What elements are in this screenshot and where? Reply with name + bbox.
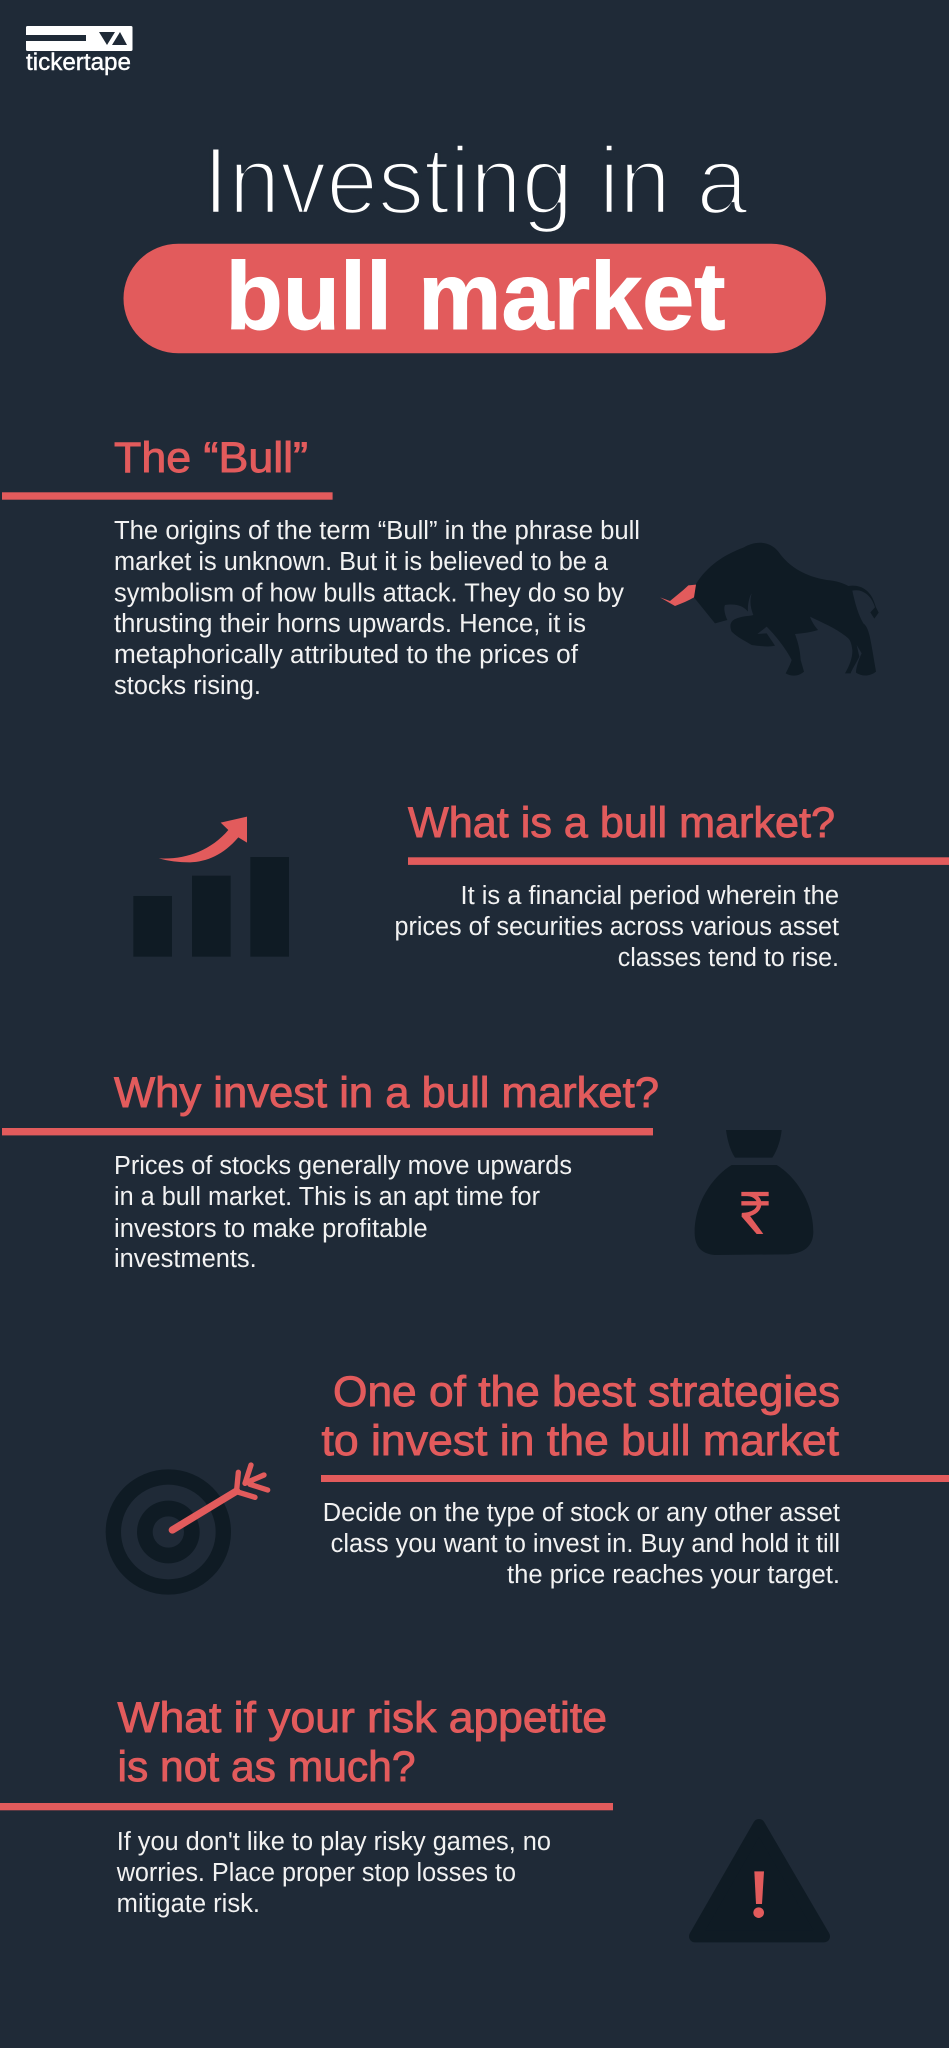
body text — [394, 882, 839, 972]
rule — [2, 492, 333, 500]
heading: best strategies: to invest in the bull market — [322, 1418, 839, 1465]
body text: metaphorically attributed to the prices of — [114, 641, 579, 669]
body text: mitigate risk. — [117, 1890, 260, 1918]
icon: rupee money bag — [695, 1130, 813, 1255]
body text: investments. — [114, 1245, 257, 1273]
body text: If you don't like to play risky games, no — [117, 1828, 551, 1856]
panel: the bull — [2, 435, 879, 700]
heading: risk appetite: What if your risk appetite — [118, 1695, 607, 1742]
rule — [321, 1475, 949, 1482]
heading: The Bull: The “Bull” — [114, 435, 308, 482]
body text: It is a financial period wherein the — [460, 882, 839, 910]
title pill: bull market: bull market — [226, 243, 726, 350]
body text: market is unknown. But it is believed to be a — [114, 548, 609, 576]
body text: The origins of the term “Bull” in the phrase bull — [114, 517, 640, 545]
body text: Decide on the type of stock or any other asset — [323, 1499, 840, 1527]
panel: risk appetite — [0, 1695, 824, 1936]
body text: class you want to invest in. Buy and hold it till — [331, 1530, 840, 1558]
title — [124, 128, 826, 353]
heading: risk appetite — [118, 1695, 607, 1791]
icon: rising bar chart with arrow — [133, 817, 289, 957]
rule — [0, 1803, 613, 1810]
heading: best strategies — [322, 1369, 840, 1465]
heading: best strategies: One of the best strategies — [333, 1369, 840, 1416]
panel: best strategies — [106, 1369, 949, 1595]
body text — [114, 1152, 572, 1273]
logo: tickertape — [26, 26, 132, 76]
body text: Prices of stocks generally move upwards — [114, 1152, 572, 1180]
heading: what is a bull market: What is a bull market? — [408, 800, 835, 847]
icon: target with arrow — [106, 1465, 268, 1595]
body text: worries. Place proper stop losses to — [116, 1859, 516, 1887]
body text: symbolism of how bulls attack. They do so by — [114, 580, 624, 608]
body text: prices of securities across various asset — [394, 913, 839, 941]
body text: stocks rising. — [114, 672, 261, 700]
icon: warning triangle — [695, 1825, 824, 1936]
body text — [323, 1499, 840, 1589]
panel: what is a bull market — [133, 800, 949, 972]
logo: tickertape: tickertape — [26, 49, 131, 76]
body text: the price reaches your target. — [507, 1561, 840, 1589]
panel: why invest in a bull market — [2, 1070, 813, 1273]
body text: classes tend to rise. — [618, 944, 839, 972]
rule — [2, 1128, 653, 1135]
body text — [114, 517, 640, 700]
title line: Investing in a: Investing in a — [203, 128, 749, 234]
body text: in a bull market. This is an apt time for — [114, 1183, 541, 1211]
body text — [116, 1828, 551, 1918]
rule — [408, 857, 949, 865]
icon: charging bull — [660, 543, 879, 676]
body text: investors to make profitable — [114, 1215, 428, 1243]
heading: risk appetite: is not as much? — [118, 1744, 416, 1791]
body text: thrusting their horns upwards. Hence, it is — [114, 610, 586, 638]
heading: why invest: Why invest in a bull market? — [114, 1070, 659, 1117]
